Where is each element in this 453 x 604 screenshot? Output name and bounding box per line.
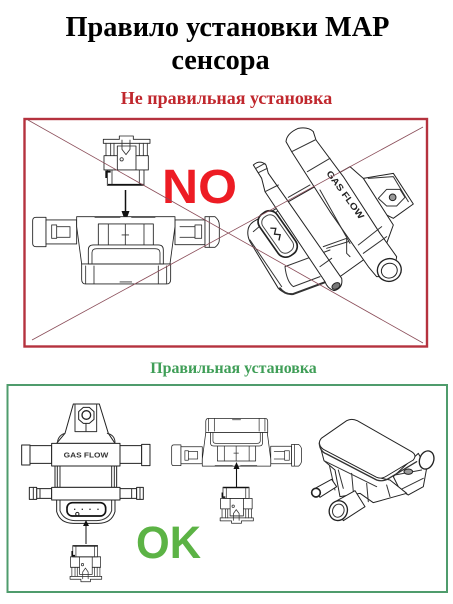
label: GAS FLOW on isometric sensor: GAS FLOW (324, 169, 367, 221)
icon: connector above sensor (103, 136, 150, 185)
icon: sensor top view (22, 404, 150, 523)
icon: sensor isometric connector side (248, 128, 413, 294)
label: GAS FLOW on top view: GAS FLOW (64, 450, 109, 459)
icon: connector below top view (70, 546, 102, 582)
label: NO: NO (162, 161, 237, 214)
icon: sensor rear front view (172, 418, 302, 466)
arrow: connector up to top view (83, 520, 89, 544)
title: сенсора (171, 45, 270, 76)
arrow: connector up to front view (234, 462, 240, 487)
title (66, 12, 389, 76)
heading: wrong installation: Не правильная установка (121, 88, 332, 108)
panel: wrong installation (24, 119, 427, 346)
icon: sensor isometric lid side (312, 419, 436, 523)
cross-out lines (28, 120, 423, 343)
icon: sensor front view (33, 217, 219, 284)
icon: connector below front view (220, 487, 253, 523)
panel: correct installation (8, 385, 447, 592)
label: OK: OK (136, 517, 201, 568)
arrow: connector down to sensor (122, 190, 130, 222)
panel frame: wrong (24, 119, 427, 346)
heading: correct installation: Правильная установка (150, 360, 317, 377)
panel frame: correct (8, 385, 447, 592)
title: Правило установки MAP (66, 12, 389, 43)
